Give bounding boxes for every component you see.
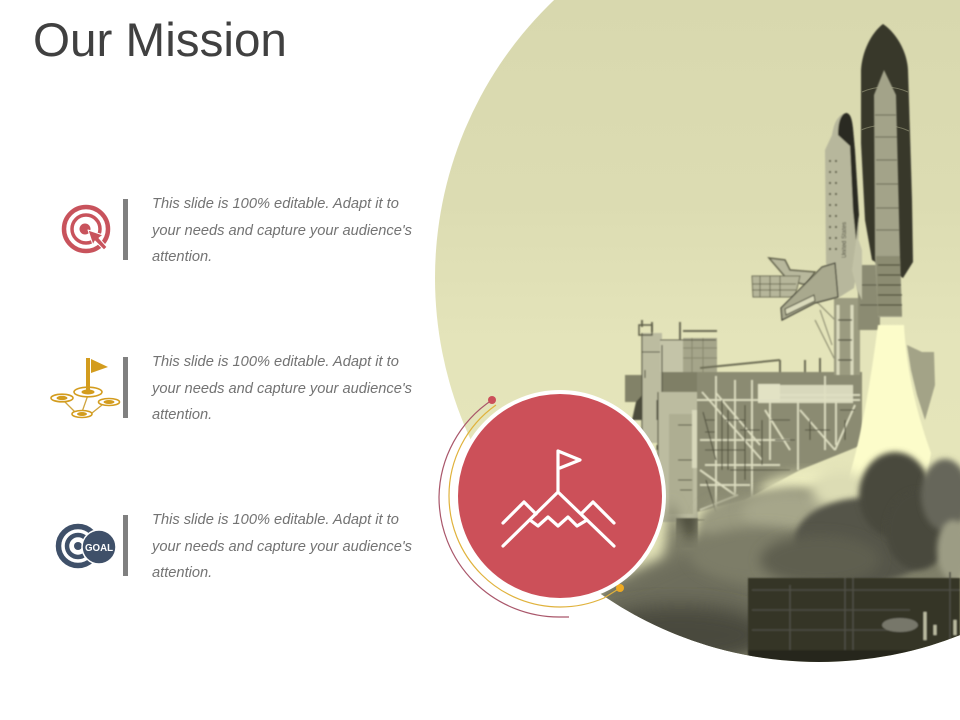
external tank — [861, 24, 913, 278]
red circle with white ring — [456, 392, 664, 600]
divider bar 3 — [123, 515, 128, 576]
yellow arc end dot — [616, 584, 624, 592]
text block 1: your needs and capture your audience's — [152, 223, 412, 239]
exhaust plume — [851, 324, 931, 476]
text block 3: attention. — [152, 565, 212, 581]
text block 2: your needs and capture your audience's — [152, 381, 412, 397]
red arc end dot — [488, 396, 496, 404]
photo circle — [430, 0, 960, 670]
orbiter — [781, 113, 862, 320]
icon: goal badge with concentric rings: GOAL — [85, 542, 114, 554]
text block 3 — [151, 512, 412, 581]
smoke clouds — [590, 452, 960, 665]
service arms — [752, 258, 880, 375]
inner yellow arc — [449, 405, 620, 607]
title: Our Mission — [33, 14, 287, 67]
divider bar 2 — [123, 357, 128, 418]
launch tower — [625, 320, 862, 548]
icon: flag on connected nodes — [50, 358, 120, 418]
outer red arc — [439, 400, 569, 617]
text block 1 — [151, 196, 412, 265]
launch platform — [748, 572, 960, 670]
text block 2 — [151, 354, 412, 423]
orbiter: United States — [842, 222, 848, 258]
text block 2: This slide is 100% editable. Adapt it to — [152, 354, 399, 370]
text block 3: This slide is 100% editable. Adapt it to — [152, 512, 399, 528]
rocket launch photo and mission badge — [435, 0, 960, 662]
far side structure — [907, 345, 935, 420]
divider bar 1 — [123, 199, 128, 260]
text block 2: attention. — [152, 407, 212, 423]
icon: goal badge with concentric rings — [56, 524, 116, 568]
icon: target with cursor — [62, 204, 110, 254]
text block 3: your needs and capture your audience's — [152, 539, 412, 555]
text block 1: This slide is 100% editable. Adapt it to — [152, 196, 399, 212]
icon: mountain with flag — [503, 451, 614, 546]
solid rocket booster — [874, 70, 902, 317]
mission badge — [439, 392, 664, 617]
text block 1: attention. — [152, 249, 212, 265]
